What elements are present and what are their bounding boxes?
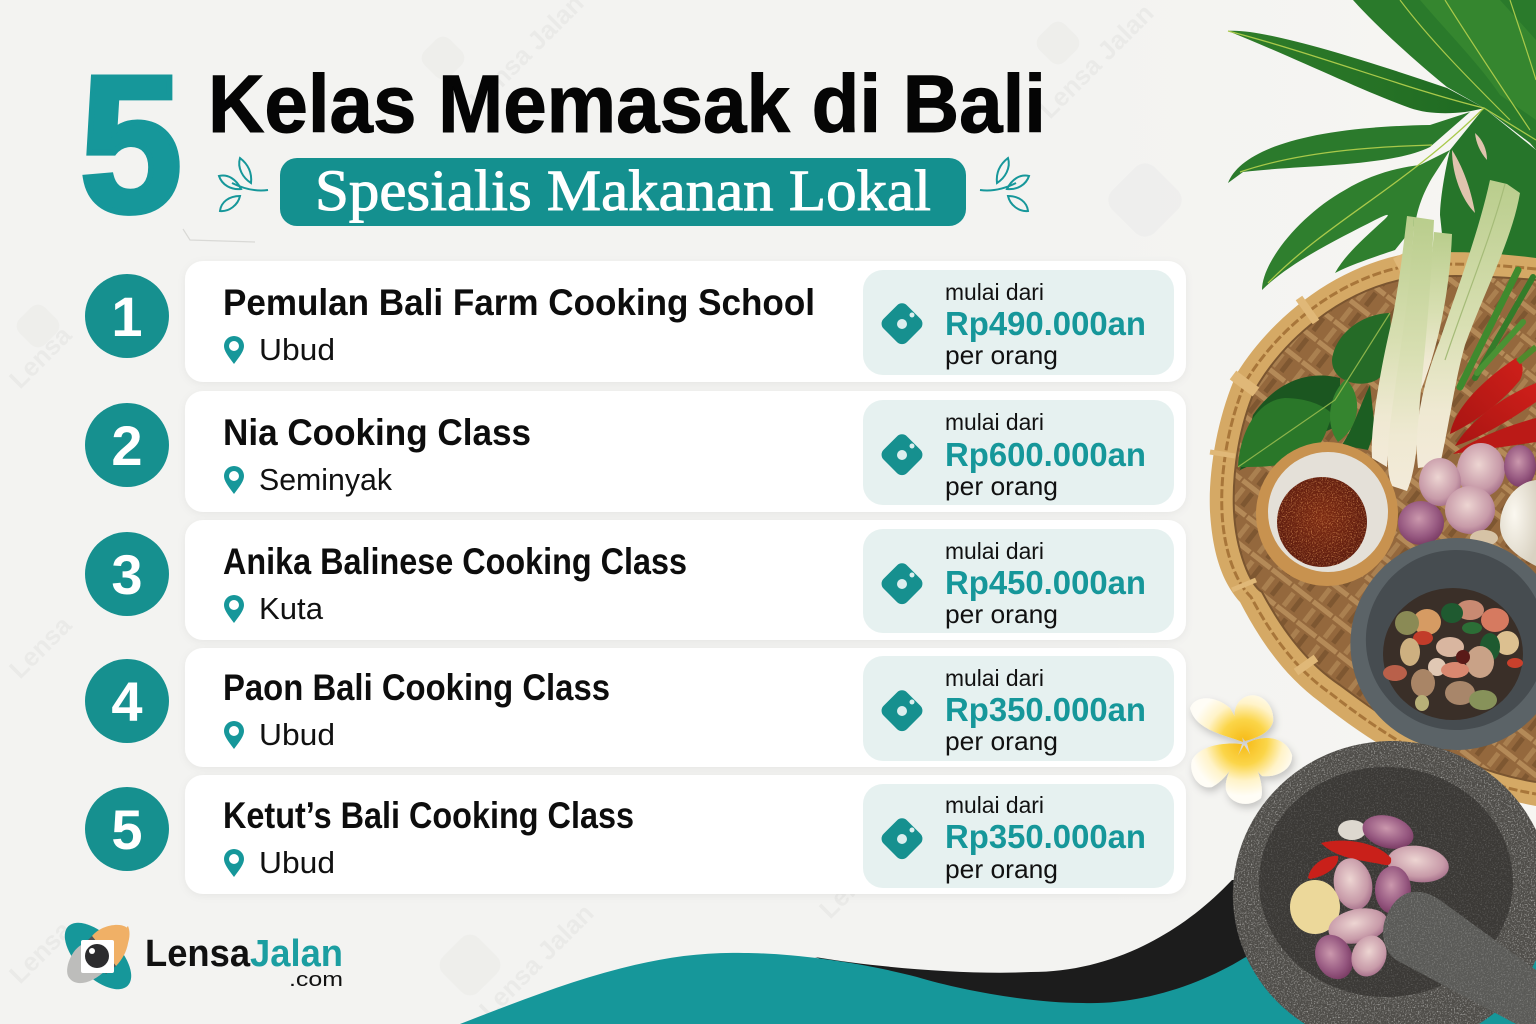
row number 1 [85, 274, 169, 358]
location 4 [224, 717, 335, 752]
card 4 [185, 648, 1186, 767]
price panel 5: Rp350.000an [945, 818, 1146, 855]
watermarks: Lensa [3, 610, 78, 684]
row number 4: 4 [111, 670, 143, 733]
red chilies [1450, 347, 1536, 454]
row number 5: 5 [111, 798, 143, 861]
row 2 [85, 391, 1186, 512]
row number 1: 1 [111, 285, 143, 348]
row 3 [85, 520, 1186, 640]
row number 3: 3 [111, 543, 143, 606]
row 5 [85, 775, 1186, 894]
card 5 [185, 775, 1186, 894]
row 1 [85, 261, 1186, 382]
row number 5 [85, 787, 169, 871]
row number 2 [85, 403, 169, 487]
watermarks [3, 0, 1187, 1024]
location 3 [224, 591, 324, 626]
location 4: Ubud [259, 717, 335, 752]
watermarks: Lensa [3, 915, 78, 989]
price panel 4: per orang [945, 726, 1058, 756]
lemongrass [1372, 180, 1520, 491]
watermarks: Lensa Jalan [473, 898, 600, 1024]
pestle [1383, 892, 1536, 1024]
logo [53, 911, 343, 1001]
price panel 2: Rp600.000an [945, 436, 1146, 473]
stone bowl with sambal matah [1350, 538, 1536, 750]
price panel 1 [863, 270, 1174, 375]
mortar ingredients [1290, 810, 1451, 985]
price panel 4: Rp350.000an [945, 691, 1146, 728]
bottom wave: black [815, 880, 1300, 1024]
stone mortar [1233, 741, 1536, 1024]
class name 1: Pemulan Bali Farm Cooking School [223, 282, 815, 323]
woven basket [1210, 252, 1536, 806]
title: Kelas Memasak di Bali [208, 59, 1046, 150]
logo icon [53, 911, 143, 1001]
price panel 1: mulai dari [945, 279, 1044, 305]
subtitle pill [280, 158, 966, 226]
price panel 5: per orang [945, 854, 1058, 884]
green stems [1460, 270, 1533, 387]
location 3: Kuta [259, 591, 324, 626]
price panel 2: mulai dari [945, 409, 1044, 435]
price panel 4 [863, 656, 1174, 761]
food illustration [1190, 0, 1536, 1024]
card 2 [185, 391, 1186, 512]
watermarks: Lensa [3, 320, 78, 394]
price panel 3: per orang [945, 599, 1058, 629]
subtitle text: Spesialis Makanan Lokal [315, 158, 931, 223]
location 5: Ubud [259, 845, 335, 880]
row number 4 [85, 659, 169, 743]
curry leaves [1238, 313, 1391, 470]
palm leaves [1228, 0, 1536, 290]
price panel 5: mulai dari [945, 792, 1044, 818]
title number 5: 5 [80, 36, 182, 253]
price panel 2: per orang [945, 471, 1058, 501]
logo wordmark: LensaJalan [145, 933, 343, 975]
icon: left sprig [219, 158, 268, 211]
class name 2: Nia Cooking Class [223, 412, 531, 453]
location 1: Ubud [259, 332, 335, 367]
class name 4: Paon Bali Cooking Class [223, 667, 610, 708]
shallots and garlic [1398, 443, 1536, 566]
row number 2: 2 [111, 414, 143, 477]
card 3 [185, 520, 1186, 640]
price panel 1: Rp490.000an [945, 305, 1146, 342]
price panel 5 [863, 784, 1174, 888]
watermarks: Lensa [813, 850, 888, 924]
location 2: Seminyak [259, 462, 392, 497]
icon: right sprig [980, 158, 1029, 211]
sambal small bowl [1256, 442, 1398, 586]
price panel 3: mulai dari [945, 538, 1044, 564]
price panel 1: per orang [945, 340, 1058, 370]
location 1 [224, 332, 335, 367]
class name 5: Ketut’s Bali Cooking Class [223, 795, 634, 836]
card 1 [185, 261, 1186, 382]
row number 3 [85, 532, 169, 616]
frangipani flower [1190, 695, 1292, 804]
price panel 4: mulai dari [945, 665, 1044, 691]
location 5 [224, 845, 335, 880]
logo domain: .com [289, 969, 343, 991]
bottom wave: teal [460, 930, 1536, 1024]
watermarks: Lensa Jalan [1033, 0, 1160, 124]
price panel 3: Rp450.000an [945, 564, 1146, 601]
price panel 2 [863, 400, 1174, 505]
price panel 3 [863, 529, 1174, 633]
row 4 [85, 648, 1186, 767]
class name 3: Anika Balinese Cooking Class [223, 541, 687, 582]
